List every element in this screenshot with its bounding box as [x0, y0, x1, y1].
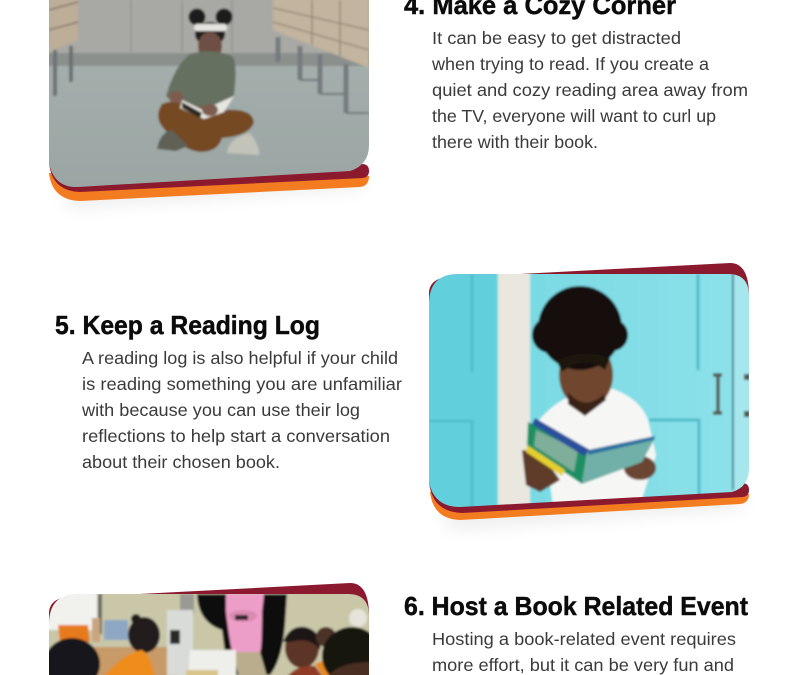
heading: tip 5: 5. Keep a Reading Log — [55, 310, 320, 340]
text block: tip 5: is reading something you are unfamiliar — [82, 374, 402, 394]
photo: girl reading with open book — [45, 0, 375, 200]
text block: tip 4: quiet and cozy reading area away from — [432, 80, 748, 100]
text block: tip 4 — [431, 28, 748, 152]
photo card: child reading on floor — [45, 0, 375, 208]
text block: tip 6: more effort, but it can be very fun and — [432, 655, 734, 675]
text block: tip 6: Hosting a book-related event requires — [432, 629, 736, 649]
photo card: boy reading at turquoise door — [425, 263, 755, 530]
text block: tip 4: the TV, everyone will want to curl up — [432, 106, 716, 126]
maroon accent band — [49, 163, 369, 192]
heading: tip 6: 6. Host a Book Related Event — [404, 591, 748, 621]
photo card: classroom book event — [44, 583, 382, 675]
orange accent band — [430, 492, 749, 520]
text block: tip 5: reflections to help start a conversation — [82, 426, 390, 446]
maroon accent band — [429, 482, 749, 513]
photo: teacher and children in classroom — [44, 590, 382, 675]
orange accent band — [49, 173, 369, 201]
photo: boy reading a green book — [425, 270, 755, 515]
text block: tip 4: It can be easy to get distracted — [432, 28, 681, 48]
maroon top accent — [429, 263, 749, 320]
text block: tip 5 — [81, 348, 402, 472]
text block: tip 5: A reading log is also helpful if your child — [82, 348, 398, 368]
text block: tip 5: with because you can use their log — [81, 400, 360, 420]
text block: tip 5: about their chosen book. — [82, 452, 280, 472]
text block: tip 4: when trying to read. If you create a — [431, 54, 709, 74]
text block: tip 4: there with their book. — [432, 132, 598, 152]
maroon top accent — [49, 583, 369, 640]
text block: tip 6 — [432, 629, 736, 675]
